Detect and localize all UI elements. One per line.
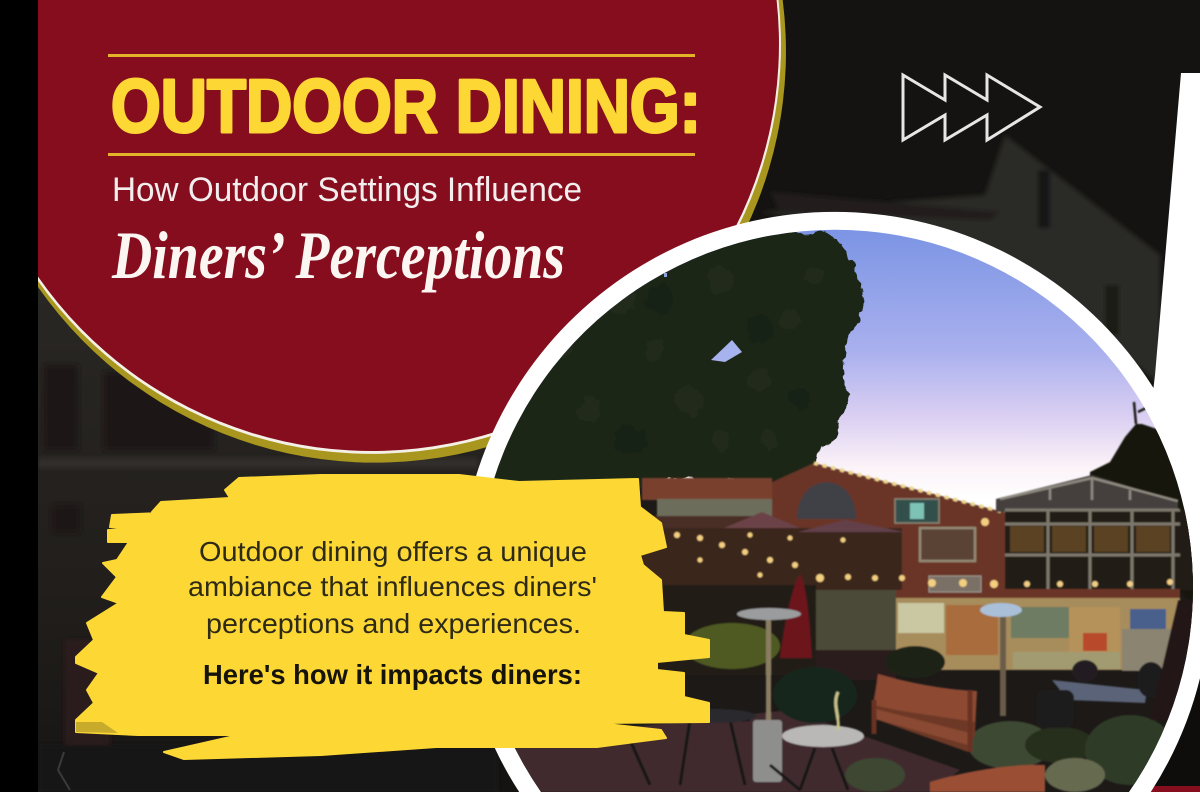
teal sign — [895, 499, 939, 523]
far tree right — [1090, 402, 1200, 610]
right white torn panel — [1120, 73, 1200, 792]
restaurant patio photo — [470, 225, 1200, 792]
patio umbrellas — [724, 512, 800, 528]
plaque — [929, 576, 981, 592]
intro text — [188, 536, 597, 639]
bench — [872, 674, 977, 752]
lower storefronts — [895, 598, 1180, 670]
yellow brush panel — [76, 475, 709, 759]
intro text: ambiance that influences diners' — [188, 571, 597, 602]
dining table and guests — [1048, 659, 1163, 728]
gaps in tree — [711, 340, 742, 362]
title rule bottom — [108, 153, 695, 156]
title rule top — [108, 54, 695, 57]
dome — [797, 482, 856, 519]
subtitle: How Outdoor Settings Influence — [112, 171, 582, 209]
sky — [510, 230, 1156, 478]
main brown building — [772, 463, 1011, 600]
right building — [996, 475, 1178, 512]
white table — [782, 725, 864, 747]
heater 1 — [737, 608, 801, 782]
red title circle with gold edge — [38, 0, 786, 463]
heater 2 — [980, 603, 1022, 716]
intro text: perceptions and experiences. — [206, 608, 581, 639]
stone wall — [814, 590, 896, 650]
bush — [684, 623, 780, 669]
dark planting mass — [662, 584, 816, 676]
dark shrubs — [773, 667, 857, 723]
left black strip — [0, 0, 38, 792]
patio table left — [630, 720, 800, 790]
lit window — [920, 528, 975, 561]
icon: triple forward arrow — [903, 75, 1040, 140]
left building upper wall — [642, 478, 772, 500]
base dark ground layer — [470, 480, 1200, 792]
photo circle white ring — [459, 212, 1200, 792]
patio dark zone — [640, 528, 902, 590]
red umbrella — [780, 574, 812, 658]
intro text: Outdoor dining offers a unique — [199, 536, 587, 567]
tall dark right edge — [1150, 599, 1193, 721]
second bench — [930, 765, 1045, 792]
roofline lights — [814, 463, 1011, 514]
large tree — [470, 231, 868, 490]
script subtitle: Diners' Perceptions: Diners’ Perceptions — [111, 217, 565, 293]
title: Outdoor Dining: OUTDOOR DINING: — [111, 64, 701, 148]
brick paving — [510, 710, 960, 792]
bold lead-in: Here's how it impacts diners: — [203, 659, 582, 690]
string lights — [674, 518, 998, 588]
